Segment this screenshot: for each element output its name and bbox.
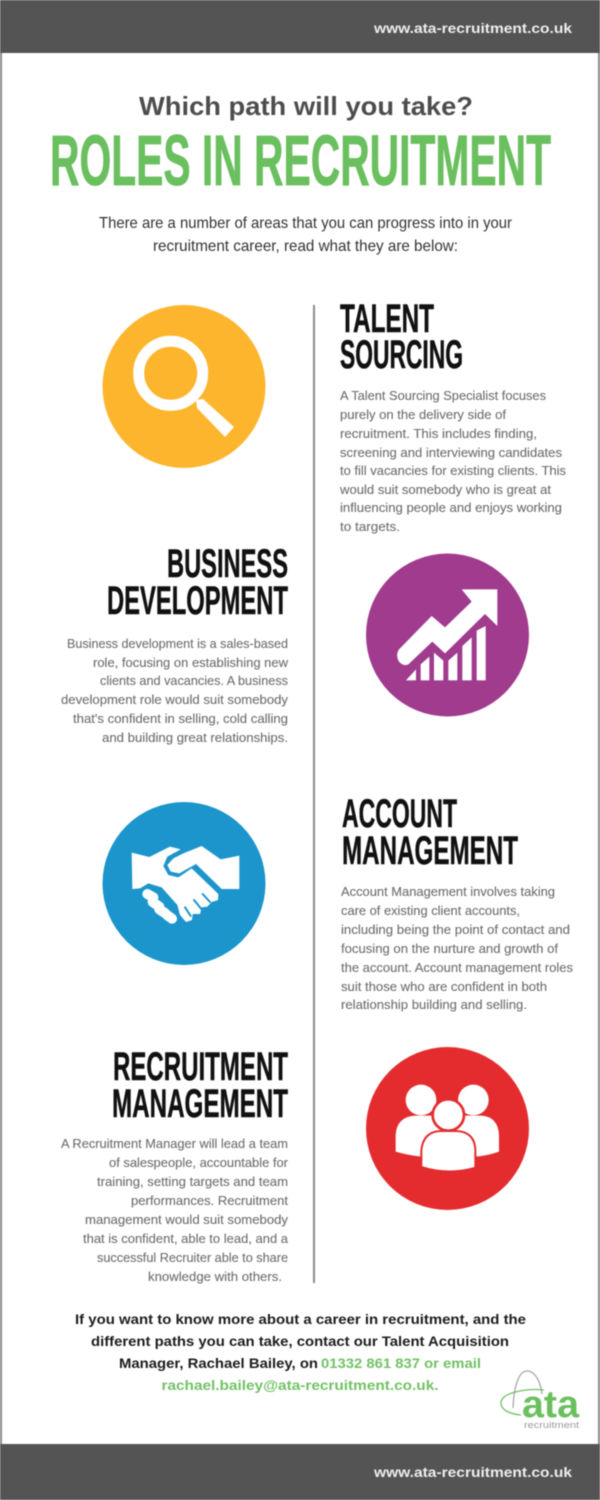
section: business development: DEVELOPMENT [107, 579, 288, 623]
section: talent sourcing: influencing people and enjoys working [340, 500, 562, 515]
section: recruitment management: training, setting targets and team [97, 1174, 288, 1189]
header bar [0, 0, 600, 53]
section: talent sourcing: TALENT [340, 297, 434, 341]
section: talent sourcing: A Talent Sourcing Specialist focuses [340, 388, 546, 403]
call to action: rachael.bailey@ata-recruitment.co.uk. [162, 1377, 438, 1393]
centre divider [313, 305, 315, 1283]
section: account management: relationship building and selling. [341, 997, 527, 1012]
section: recruitment management: of salespeople, accountable for [109, 1155, 289, 1170]
section: account management: ACCOUNT [342, 792, 457, 836]
section: recruitment management: MANAGEMENT [112, 1082, 288, 1126]
footer bar: www.ata-recruitment.co.uk [373, 1464, 572, 1480]
section: recruitment management: successful Recruiter able to share [97, 1250, 288, 1265]
section: business development: that's confident in selling, cold calling [73, 711, 288, 726]
section: talent sourcing: recruitment. This includes finding, [340, 426, 537, 441]
footer bar [0, 1444, 600, 1500]
section: business development: Business development is a sales-based [67, 636, 288, 651]
section: account management: suit those who are confident in both [341, 979, 547, 994]
icon: team of people [366, 1047, 529, 1210]
intro text [99, 215, 513, 255]
section: talent sourcing: purely on the delivery side of [340, 407, 506, 422]
call to action: Manager, Rachael Bailey, on [119, 1355, 318, 1371]
intro text: There are a number of areas that you can progress into in your [99, 215, 513, 232]
section: account management [341, 792, 573, 1012]
call to action [75, 1311, 526, 1393]
section: business development: role, focusing on establishing new [93, 655, 289, 670]
icon: handshake [102, 802, 266, 965]
section: account management: Account Management involves taking [341, 884, 555, 899]
section: business development: BUSINESS [167, 542, 288, 586]
icon: growth chart [366, 554, 529, 716]
logo: ata recruitment: recruitment [524, 1420, 580, 1430]
section: business development: development role would suit somebody [61, 692, 288, 707]
section: recruitment management: A Recruitment Manager will lead a team [61, 1136, 288, 1151]
section: account management: including being the point of contact and [341, 922, 570, 937]
section: talent sourcing [339, 297, 566, 534]
section: recruitment management: that is confident, able to lead, and a [83, 1231, 289, 1246]
section: account management: focusing on the nurture and growth of [341, 941, 558, 956]
logo: ata recruitment [501, 1371, 580, 1430]
section: business development: and building great relationships. [102, 730, 288, 745]
header bar: www.ata-recruitment.co.uk [373, 20, 572, 36]
call to action: If you want to know more about a career in recruitment, and the [75, 1311, 526, 1327]
section: talent sourcing: to targets. [340, 519, 400, 534]
section: business development: clients and vacancies. A business [100, 673, 288, 688]
section: recruitment management [61, 1045, 289, 1284]
call to action: different paths you can take, contact our Talent Acquisition [91, 1333, 509, 1349]
section: talent sourcing: to fill vacancies for existing clients. This [340, 463, 566, 478]
section: account management: the account. Account management roles [341, 960, 573, 975]
icon: magnifying glass [102, 305, 266, 468]
intro text: recruitment career, read what they are below: [153, 238, 458, 255]
call to action: 01332 861 837 or email [321, 1355, 481, 1371]
section: business development [61, 542, 289, 745]
section: talent sourcing: would suit somebody who is great at [339, 482, 551, 497]
section: recruitment management: management would suit somebody [85, 1212, 289, 1227]
section: talent sourcing: screening and interviewing candidates [340, 445, 562, 460]
section: recruitment management: knowledge with others. [148, 1269, 282, 1284]
logo: ata recruitment: ata [522, 1384, 580, 1426]
section: recruitment management: performances. Recruitment [131, 1193, 288, 1208]
heading: which path: Which path will you take? [139, 91, 473, 121]
section: recruitment management: RECRUITMENT [113, 1045, 288, 1089]
section: talent sourcing: SOURCING [340, 333, 463, 377]
section: account management: care of existing client accounts, [341, 903, 520, 918]
